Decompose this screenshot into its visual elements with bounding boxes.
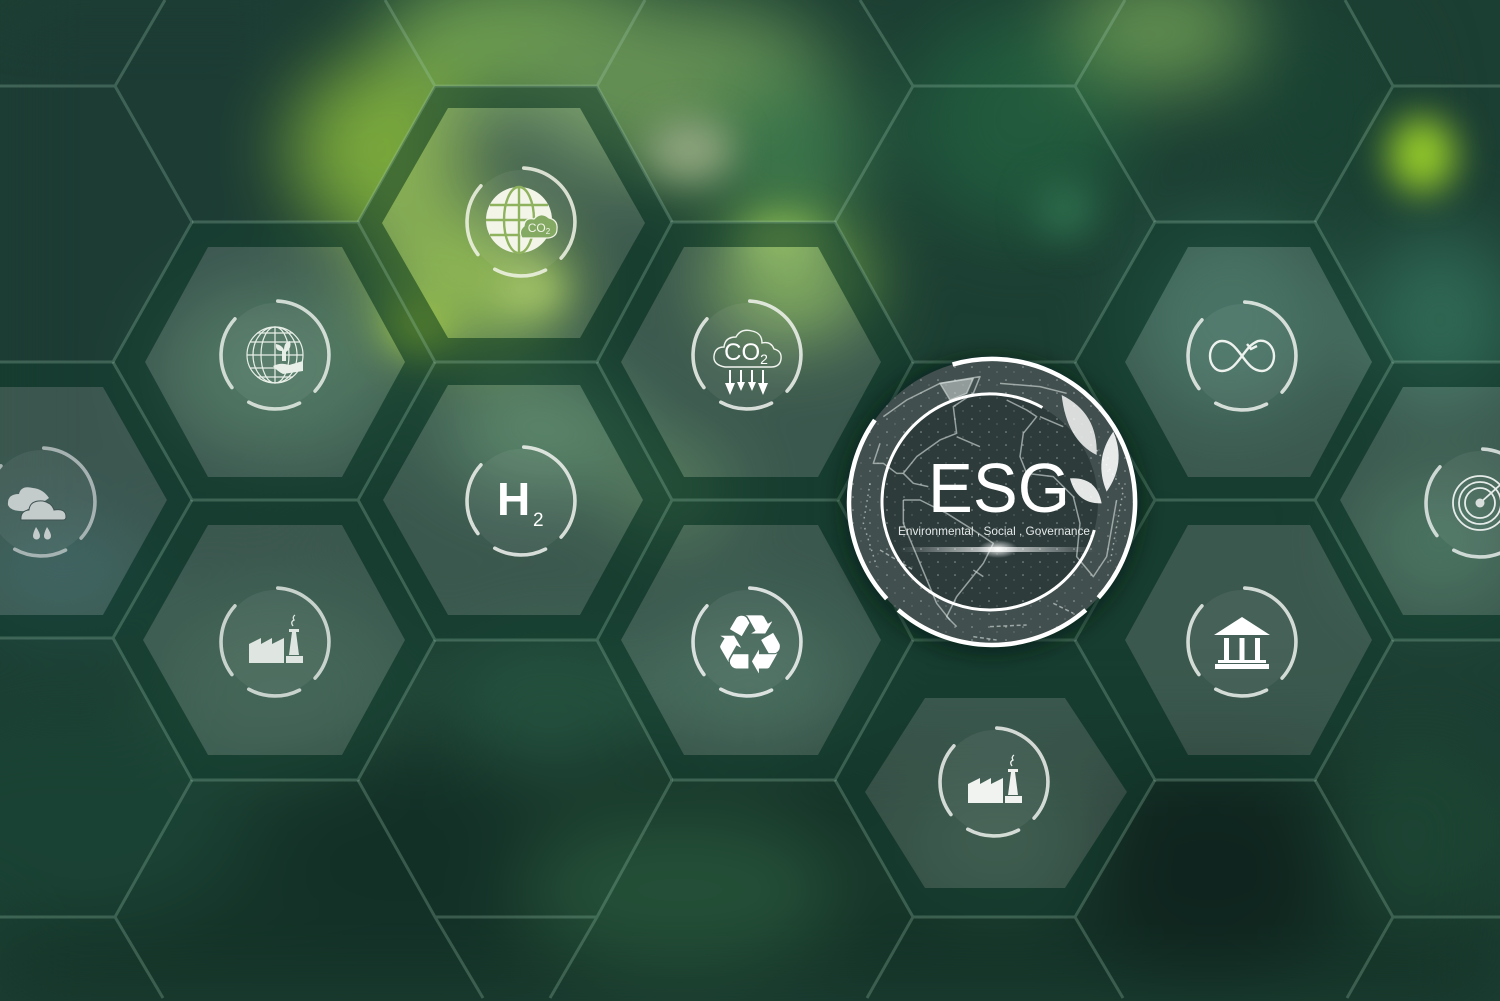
label: CO2: CO — [724, 339, 760, 366]
outer white ring arcs — [849, 359, 1135, 645]
ESG globe emblem — [842, 355, 1142, 655]
icon: radar target — [1426, 449, 1500, 557]
ESG title: ESG — [928, 449, 1070, 527]
icon: factory left — [221, 588, 329, 696]
icon: H2 hydrogen — [467, 447, 575, 555]
leaves — [1062, 395, 1119, 503]
label: CO2: 2 — [760, 351, 768, 367]
label: CO2 small: CO — [528, 221, 546, 235]
icon: rain clouds — [0, 448, 95, 556]
world map continents — [863, 377, 1123, 640]
icon: recycling arrows: ♻ — [713, 598, 787, 693]
icon: infinity loop — [1188, 302, 1296, 410]
label: H2: 2 — [533, 510, 544, 531]
icon: CO2 cloud with down arrows — [693, 301, 801, 409]
icon: recycling arrows — [693, 588, 801, 696]
icon: globe with hand and seedling — [221, 301, 329, 409]
icon: institution building — [1188, 588, 1296, 696]
inner white ring arc — [882, 394, 1094, 610]
hexagon cells: frosted inner panels — [0, 108, 1500, 888]
icon: globe with CO2 cloud — [467, 168, 575, 276]
globe body — [849, 359, 1135, 645]
ESG subtitle: Environmental , Social , Governance — [898, 524, 1090, 538]
lens flare — [900, 540, 1095, 558]
label: CO2 small: 2 — [546, 227, 551, 236]
icon: factory bottom — [940, 728, 1048, 836]
label: H2: H — [497, 473, 530, 525]
